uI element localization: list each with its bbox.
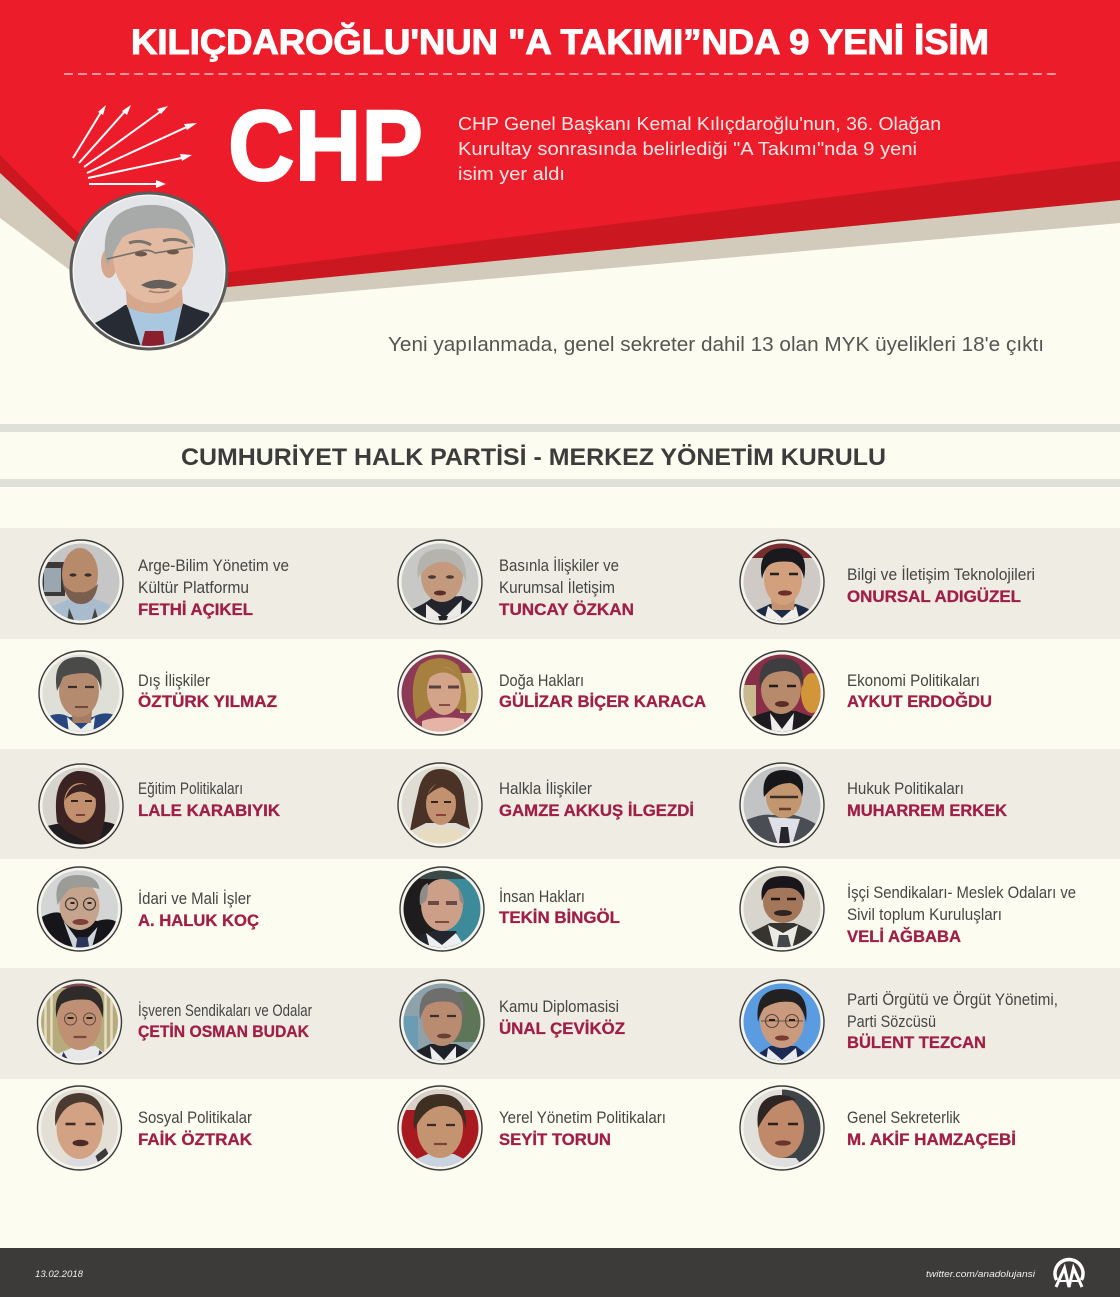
- role text: Eğitim Politikaları: [138, 779, 243, 798]
- entry: Gülizar Biçer Karaca: [398, 651, 706, 735]
- name: FAİK ÖZTRAK: [138, 1130, 252, 1149]
- role text: [499, 556, 619, 597]
- name: GAMZE AKKUŞ İLGEZDİ: [499, 802, 694, 820]
- portrait: Muharrem Erkek: [740, 763, 824, 847]
- entry: Bülent Tezcan: [740, 980, 1058, 1064]
- name: SEYİT TORUN: [499, 1131, 611, 1149]
- portrait: Fethi Açıkel: [39, 540, 123, 624]
- header banner: [0, 0, 1120, 315]
- title: KILIÇDAROĞLU'NUN "A TAKIMI”NDA 9 YENİ İSİM: [131, 22, 989, 62]
- entry: Tekin Bingöl: [400, 867, 620, 951]
- portrait: Lale Karabıyık: [39, 764, 123, 848]
- role text: Ekonomi Politikaları: [847, 671, 980, 690]
- entry: Öztürk Yılmaz: [39, 651, 277, 735]
- entry: Seyit Torun: [398, 1086, 666, 1170]
- role text: Parti Sözcüsü: [847, 1012, 936, 1031]
- CHP logotype: CHP: [228, 90, 423, 202]
- role text: Dış İlişkiler: [138, 671, 210, 690]
- portrait: Aykut Erdoğdu: [740, 651, 824, 735]
- role text: İnsan Hakları: [499, 887, 585, 906]
- entry: Onursal Adıgüzel: [740, 540, 1035, 624]
- footer bar: [0, 1248, 1120, 1297]
- date: 13.02.2018: [35, 1269, 84, 1280]
- role text: Parti Örgütü ve Örgüt Yönetimi,: [847, 990, 1058, 1009]
- intro paragraph: CHP Genel Başkanı Kemal Kılıçdaroğlu'nun, 36. Olağan: [458, 113, 941, 134]
- name: ÜNAL ÇEVİKÖZ: [499, 1019, 625, 1038]
- entry: Lale Karabıyık: [39, 764, 280, 848]
- entry: Çetin Osman Budak: [38, 980, 312, 1064]
- role text: [138, 556, 289, 597]
- entry: Tuncay Özkan: [398, 540, 634, 624]
- portrait: Gamze Akkuş İlgezdi: [398, 763, 482, 847]
- portrait: Tuncay Özkan: [398, 540, 482, 624]
- role text: Doğa Hakları: [499, 671, 584, 690]
- icon: AA logo: [1055, 1260, 1083, 1287]
- role text: Halkla İlişkiler: [499, 779, 592, 798]
- name: ÇETİN OSMAN BUDAK: [138, 1023, 309, 1041]
- intro paragraph: isim yer aldı: [458, 163, 565, 184]
- entry: Aykut Erdoğdu: [740, 651, 992, 735]
- role text: [847, 883, 1076, 924]
- portrait: Tekin Bingöl: [400, 867, 484, 951]
- portrait: Gülizar Biçer Karaca: [398, 651, 482, 735]
- role text: Basınla İlişkiler ve: [499, 556, 619, 575]
- icon: CHP six arrows: [73, 105, 197, 188]
- entry: Faik Öztrak: [38, 1086, 252, 1170]
- portrait: A. Haluk Koç: [38, 867, 122, 951]
- role text: Kültür Platformu: [138, 578, 249, 597]
- role text: Kurumsal İletişim: [499, 578, 615, 597]
- intro paragraph: [458, 113, 941, 184]
- name: GÜLİZAR BİÇER KARACA: [499, 692, 706, 711]
- name: ONURSAL ADIGÜZEL: [847, 587, 1021, 606]
- role text: İşveren Sendikaları ve Odalar: [138, 1001, 312, 1020]
- portrait: Faik Öztrak: [38, 1086, 122, 1170]
- name: BÜLENT TEZCAN: [847, 1033, 986, 1052]
- section heading: CUMHURİYET HALK PARTİSİ - MERKEZ YÖNETİM KURULU: [181, 444, 886, 471]
- name: M. AKİF HAMZAÇEBİ: [847, 1131, 1016, 1149]
- role text: Sivil toplum Kuruluşları: [847, 905, 1002, 924]
- entry: Fethi Açıkel: [39, 540, 289, 624]
- name: VELİ AĞBABA: [847, 927, 961, 946]
- name: MUHARREM ERKEK: [847, 802, 1007, 820]
- name: FETHİ AÇIKEL: [138, 601, 253, 619]
- entry: Ünal Çeviköz: [400, 980, 625, 1064]
- name: TUNCAY ÖZKAN: [499, 600, 634, 619]
- role text: İşçi Sendikaları- Meslek Odaları ve: [847, 883, 1076, 902]
- role text: İdari ve Mali İşler: [138, 889, 251, 908]
- portrait: Öztürk Yılmaz: [39, 651, 123, 735]
- portrait: Çetin Osman Budak: [38, 980, 122, 1064]
- twitter handle: twitter.com/anadolujansi: [926, 1269, 1036, 1280]
- entry: Muharrem Erkek: [740, 763, 1007, 847]
- portrait: Veli Ağbaba: [740, 867, 824, 951]
- role text: [847, 990, 1058, 1031]
- role text: Hukuk Politikaları: [847, 779, 964, 798]
- name: LALE KARABIYIK: [138, 802, 280, 820]
- role text: Kamu Diplomasisi: [499, 997, 619, 1016]
- portrait: Seyit Torun: [398, 1086, 482, 1170]
- entry: M. Akif Hamzaçebi: [740, 1086, 1016, 1170]
- role text: Bilgi ve İletişim Teknolojileri: [847, 565, 1035, 584]
- name: A. HALUK KOÇ: [138, 912, 259, 930]
- subheading text: Yeni yapılanmada, genel sekreter dahil 13 olan MYK üyelikleri 18'e çıktı: [388, 334, 1044, 356]
- portrait: M. Akif Hamzaçebi: [740, 1086, 824, 1170]
- portrait: Kemal Kılıçdaroğlu: [71, 193, 227, 349]
- name: ÖZTÜRK YILMAZ: [138, 692, 277, 711]
- role text: Sosyal Politikalar: [138, 1108, 252, 1127]
- role text: Yerel Yönetim Politikaları: [499, 1108, 666, 1127]
- portrait: Ünal Çeviköz: [400, 980, 484, 1064]
- portrait: Onursal Adıgüzel: [740, 540, 824, 624]
- intro paragraph: Kurultay sonrasında belirlediği "A Takımı"nda 9 yeni: [458, 138, 917, 159]
- role text: Genel Sekreterlik: [847, 1108, 960, 1127]
- role text: Arge-Bilim Yönetim ve: [138, 556, 289, 575]
- portrait: Bülent Tezcan: [740, 980, 824, 1064]
- entry: Gamze Akkuş İlgezdi: [398, 763, 694, 847]
- name: TEKİN BİNGÖL: [499, 908, 620, 927]
- name: AYKUT ERDOĞDU: [847, 692, 992, 711]
- entry: A. Haluk Koç: [38, 867, 259, 951]
- entry: Veli Ağbaba: [740, 867, 1076, 951]
